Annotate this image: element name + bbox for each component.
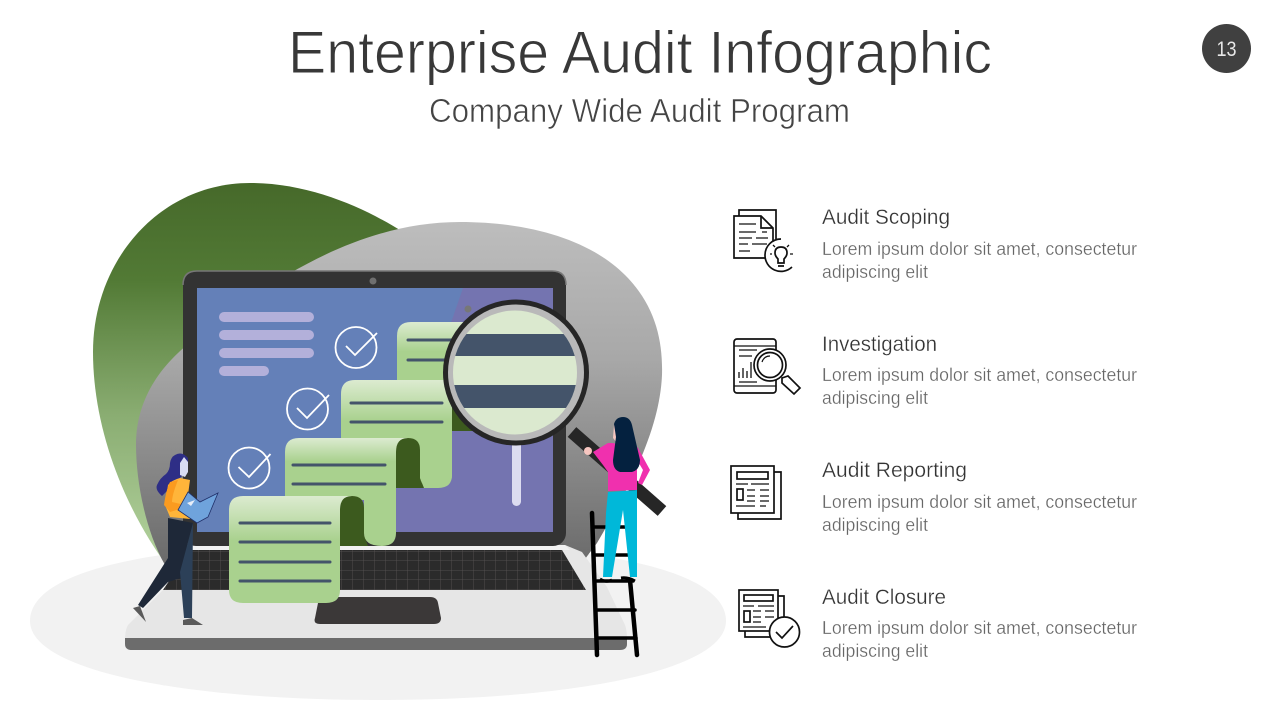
- check marks: [228, 327, 377, 488]
- document 1: [397, 322, 480, 431]
- icon: tablet with magnifier: [734, 339, 800, 394]
- heading: Audit Scoping: [822, 206, 950, 229]
- icon: newspaper pages: [731, 466, 781, 519]
- document 3: [285, 438, 452, 500]
- document 4: [229, 490, 396, 603]
- document 2: [341, 380, 452, 488]
- woman with book: [133, 454, 218, 625]
- description: Lorem ipsum dolor sit amet, consectetur: [822, 365, 1137, 385]
- pale screen detail: magnifier shadow bar: [512, 440, 521, 506]
- gray background blob: [136, 222, 662, 565]
- heading: Audit Closure: [822, 586, 946, 609]
- illustration: laptop audit scene: [30, 183, 726, 700]
- item 4: Audit Closure: [739, 586, 1137, 661]
- laptop screen: [183, 271, 566, 546]
- title: Enterprise Audit Infographic: [288, 19, 992, 86]
- description: Lorem ipsum dolor sit amet, consectetur: [822, 492, 1137, 512]
- icon: newspaper with check badge: [739, 590, 800, 647]
- description: adipiscing elit: [822, 262, 928, 282]
- floor ellipse: [30, 542, 726, 700]
- icon: document with light bulb: [734, 210, 797, 271]
- item 3: Audit Reporting: [731, 459, 1137, 535]
- item 2: Investigation: [734, 333, 1137, 408]
- description: adipiscing elit: [822, 388, 928, 408]
- magnifying glass: [440, 300, 662, 511]
- description: Lorem ipsum dolor sit amet, consectetur: [822, 618, 1137, 638]
- description: Lorem ipsum dolor sit amet, consectetur: [822, 239, 1137, 259]
- green background blob: [93, 183, 403, 570]
- description: adipiscing elit: [822, 641, 928, 661]
- heading: Audit Reporting: [822, 459, 967, 482]
- item 1: Audit Scoping: [734, 206, 1137, 282]
- description: adipiscing elit: [822, 515, 928, 535]
- ladder: [592, 513, 637, 655]
- subtitle: Company Wide Audit Program: [429, 92, 850, 129]
- woman on ladder: [584, 417, 650, 581]
- page number badge: [1202, 24, 1251, 73]
- text placeholder lines: [219, 312, 314, 376]
- page number badge: 13: [1216, 38, 1236, 61]
- laptop base: [125, 545, 627, 650]
- heading: Investigation: [822, 333, 937, 356]
